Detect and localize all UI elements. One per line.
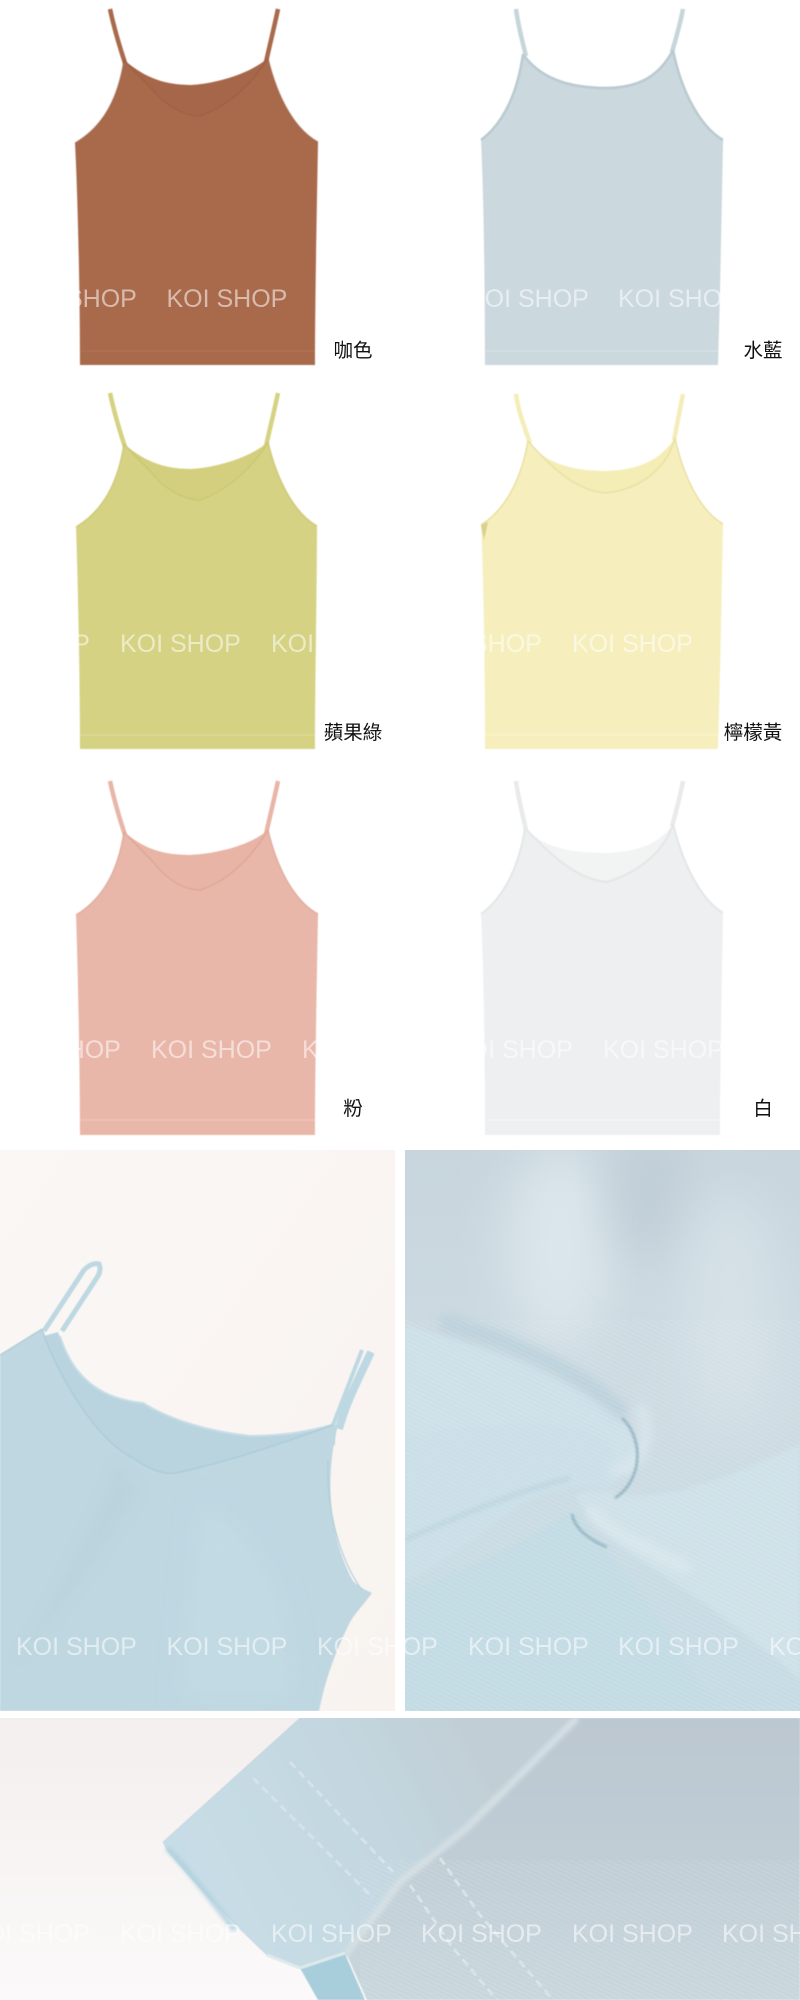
watermark row 5: KOI SHOP (572, 1920, 693, 1948)
watermark row 4: KOI SHOP (166, 1633, 287, 1661)
fabric hem (163, 1718, 800, 2000)
watermark row 1 (16, 285, 800, 313)
watermark row 2: KOI SHOP (271, 630, 392, 658)
panel: apple green camisole (76, 393, 317, 749)
watermark row 4: KOI SHOP (468, 1633, 589, 1661)
watermark row 5: KOI SHOP (120, 1920, 241, 1948)
watermark row 4: KOI SHOP (317, 1633, 438, 1661)
watermark row 5: KOI SHOP (271, 1920, 392, 1948)
watermark row 3: KOI SHOP (151, 1036, 272, 1064)
watermark row 3: KOI SHOP (452, 1036, 573, 1064)
label: 粉: 粉 (343, 1098, 363, 1120)
watermark row 3: KOI SHOP (302, 1036, 423, 1064)
panel: pink camisole (76, 781, 318, 1135)
watermark row 1: KOI SHOP (16, 285, 137, 313)
back panel of neckline (30, 1332, 335, 1480)
watermark row 2: KOI SHOP (572, 630, 693, 658)
label: 蘋果綠: 蘋果綠 (324, 722, 382, 744)
swirl creases (572, 1418, 637, 1547)
watermark row 3: KOI SHOP (0, 1036, 121, 1064)
label: 咖色: 咖色 (333, 340, 373, 362)
watermark row 2: KOI SHOP (421, 630, 542, 658)
panel: fabric swirl photo (405, 1120, 800, 1711)
label: 白: 白 (753, 1098, 773, 1120)
watermark row 4 (16, 1633, 800, 1661)
panel: brown camisole (75, 9, 318, 365)
watermark row 5: KOI SHOP (421, 1920, 542, 1948)
label: 檸檬黃: 檸檬黃 (724, 722, 782, 744)
panel: aqua grey camisole (481, 9, 723, 365)
watermark row 1: KOI SHOP (166, 285, 287, 313)
panel: white camisole (481, 781, 723, 1135)
watermark row 4: KOI SHOP (16, 1633, 137, 1661)
shoulder straps (44, 1264, 371, 1429)
watermark row 1: KOI SHOP (317, 285, 438, 313)
watermark row 3: KOI SHOP (603, 1036, 724, 1064)
stitching lines (253, 1762, 553, 2000)
label: 水藍: 水藍 (743, 340, 783, 362)
camisole body (0, 1329, 372, 1711)
watermark row 1: KOI SHOP (468, 285, 589, 313)
watermark row 2: KOI SHOP (120, 630, 241, 658)
watermark row 5 (0, 1920, 800, 1948)
panel: neckline detail photo (0, 1150, 395, 1711)
fold shading (405, 1322, 800, 1711)
watermark row 2 (0, 630, 800, 658)
panel: hem stitching photo (0, 1718, 800, 2000)
watermark row 1: KOI SHOP (618, 285, 739, 313)
watermark row 3 (0, 1036, 800, 1064)
watermark row 4: KOI SHOP (618, 1633, 739, 1661)
panel: lemon yellow camisole (481, 394, 723, 749)
